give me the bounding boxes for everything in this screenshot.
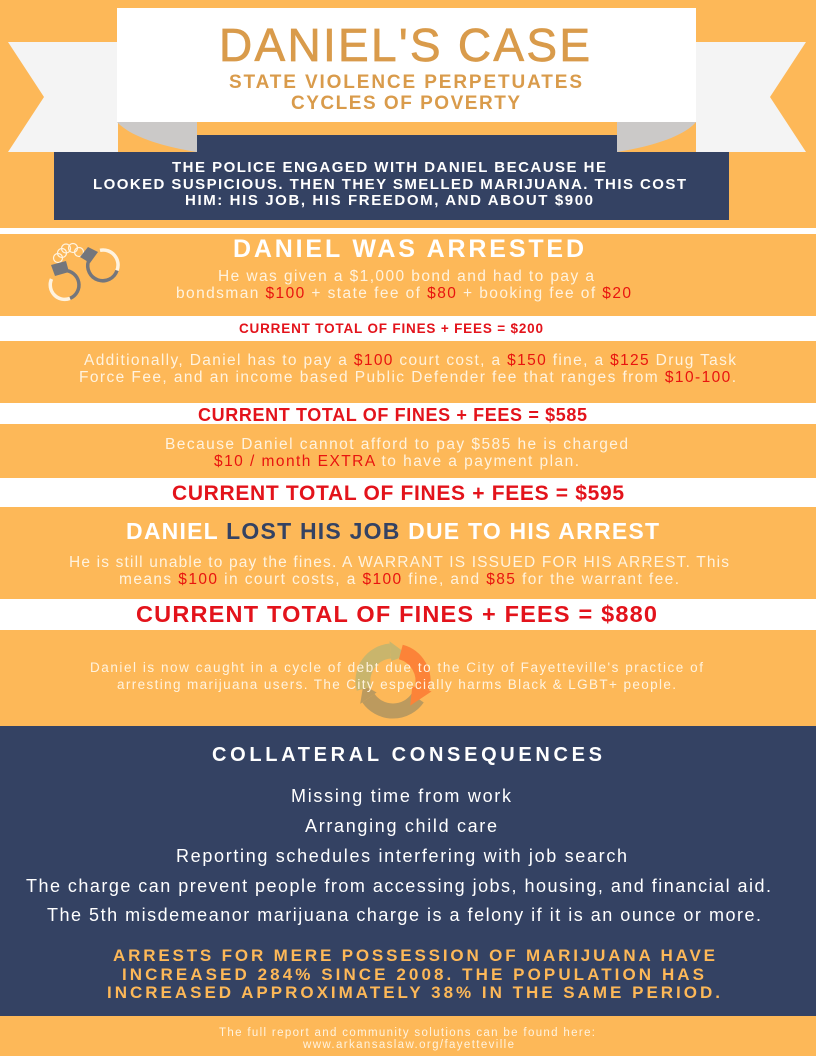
section: Daniel lost his job: He is still unable to pay the fines. A WARRANT IS ISSUED FOR HIS ARREST. This [69, 554, 729, 571]
intro panel [54, 122, 729, 220]
panel: collateral consequences [0, 726, 816, 1016]
icon: handcuffs [50, 244, 118, 299]
footer: The full report and community solutions can be found here: [219, 1027, 595, 1039]
section: Daniel lost his job: means $100 in court costs, a $100 fine, and $85 for the warrant fee. [119, 571, 679, 588]
heading: collateral consequences: COLLATERAL CONSEQUENCES [212, 744, 602, 766]
running total: $595: CURRENT TOTAL OF FINES + FEES = $595 [172, 482, 624, 505]
header ribbon banner [8, 8, 806, 152]
list of consequences [26, 786, 771, 925]
callout: arrest statistics: INCREASED APPROXIMATELY 38% IN THE SAME PERIOD. [107, 983, 720, 1002]
icon: cycle arrows [360, 641, 432, 711]
intro panel: THE POLICE ENGAGED WITH DANIEL BECAUSE HE [172, 159, 606, 176]
subtitle [229, 72, 582, 114]
text: cycle of debt [90, 660, 703, 692]
running total: $585: CURRENT TOTAL OF FINES + FEES = $585 [198, 405, 587, 425]
intro panel: LOOKED SUSPICIOUS. THEN THEY SMELLED MARIJUANA. THIS COST [93, 176, 686, 193]
callout: arrest statistics: INCREASED 284% SINCE 2008. THE POPULATION HAS [122, 965, 704, 984]
white stripes between sections [0, 228, 816, 630]
subtitle: STATE VIOLENCE PERPETUATES [229, 72, 582, 93]
section: Daniel lost his job [69, 518, 729, 588]
list of consequences: Missing time from work [291, 786, 512, 806]
text: payment plan: $10 / month EXTRA to have a payment plan. [214, 453, 579, 470]
section: Daniel lost his job: DANIEL LOST HIS JOB DUE TO HIS ARREST [126, 518, 659, 544]
text: cycle of debt: Daniel is now caught in a cycle of debt due to the City of Fayetteville's practice of [90, 660, 703, 675]
section: Daniel was arrested: He was given a $1,000 bond and had to pay a [218, 268, 594, 285]
callout: arrest statistics [107, 946, 720, 1002]
text: payment plan: Because Daniel cannot afford to pay $585 he is charged [165, 436, 628, 453]
text: additional fees: Force Fee, and an income based Public Defender fee that ranges from $10-100. [79, 369, 736, 386]
list of consequences: Arranging child care [305, 816, 497, 836]
section: Daniel was arrested [176, 235, 631, 302]
title: DANIEL'S CASE [219, 19, 590, 71]
text: payment plan [165, 436, 628, 470]
intro panel: HIM: HIS JOB, HIS FREEDOM, AND ABOUT $900 [185, 192, 593, 209]
list of consequences: The 5th misdemeanor marijuana charge is a felony if it is an ounce or more. [47, 905, 761, 925]
text: cycle of debt: arresting marijuana users. The City especially harms Black & LGBT+ people. [117, 677, 676, 692]
callout: arrest statistics: ARRESTS FOR MERE POSSESSION OF MARIJUANA HAVE [113, 946, 715, 965]
text: additional fees: Additionally, Daniel has to pay a $100 court cost, a $150 fine, a $125 Drug Task [84, 352, 736, 369]
text: additional fees [79, 352, 736, 386]
list of consequences: The charge can prevent people from accessing jobs, housing, and financial aid. [26, 876, 771, 896]
running total: $880: CURRENT TOTAL OF FINES + FEES = $880 [136, 601, 657, 627]
footer: www.arkansaslaw.org/fayetteville [302, 1039, 514, 1051]
list of consequences: Reporting schedules interfering with job search [176, 846, 627, 866]
section: Daniel was arrested: DANIEL WAS ARRESTED [233, 235, 584, 263]
footer [219, 1027, 595, 1051]
section: Daniel was arrested: bondsman $100 + state fee of $80 + booking fee of $20 [176, 285, 631, 302]
running total: $200: CURRENT TOTAL OF FINES + FEES = $200 [239, 321, 543, 336]
subtitle: CYCLES OF POVERTY [291, 93, 520, 114]
